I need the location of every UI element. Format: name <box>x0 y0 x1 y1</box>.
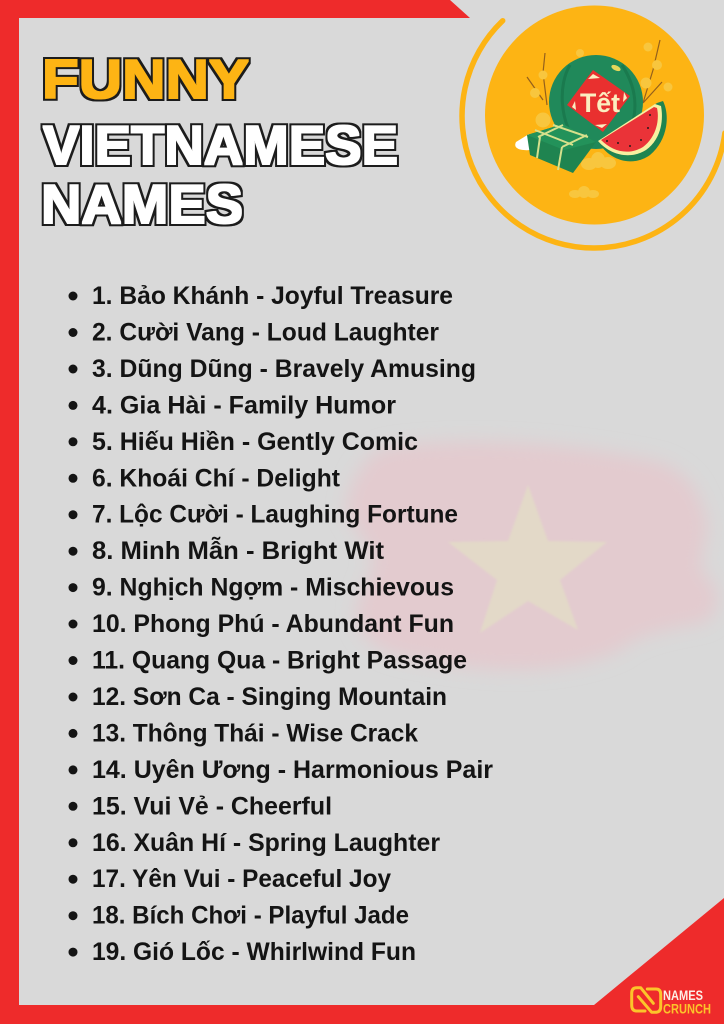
list item 8: 8. Minh Mẫn - Bright Wit <box>92 535 385 565</box>
list item 11: 11. Quang Qua - Bright Passage <box>92 646 467 674</box>
list item 4: 4. Gia Hài - Family Humor <box>92 391 396 419</box>
list item 14: 14. Uyên Ương - Harmonious Pair <box>92 756 493 784</box>
icon: banh chung <box>515 124 596 173</box>
logo text: NAMES: NAMES <box>663 988 703 1003</box>
list item 5: 5. Hiếu Hiền - Gently Comic <box>92 428 418 456</box>
watermark: Vietnam flag <box>345 442 717 670</box>
icon: N mark <box>632 988 661 1012</box>
list item 17: 17. Yên Vui - Peaceful Joy <box>92 865 391 893</box>
title: FUNNY: FUNNY <box>42 48 249 110</box>
decorative ring arc <box>462 21 724 248</box>
list item 18: 18. Bích Chơi - Playful Jade <box>92 902 409 930</box>
list item 3: 3. Dũng Dũng - Bravely Amusing <box>92 355 476 383</box>
logo: Names Crunch <box>632 988 711 1016</box>
list item 12: 12. Sơn Ca - Singing Mountain <box>92 683 447 711</box>
list item 15: 15. Vui Vẻ - Cheerful <box>92 792 332 820</box>
list item 2: 2. Cười Vang - Loud Laughter <box>92 318 439 346</box>
list item 10: 10. Phong Phú - Abundant Fun <box>92 610 454 638</box>
title: NAMES: NAMES <box>41 173 243 235</box>
label: Tet: Tết <box>580 88 620 118</box>
icon: apricot branches <box>527 40 662 105</box>
list item 7: 7. Lộc Cười - Laughing Fortune <box>92 501 458 529</box>
yellow circle <box>485 6 704 224</box>
icon: round watermelon <box>549 55 643 149</box>
list item 1: 1. Bảo Khánh - Joyful Treasure <box>92 282 453 310</box>
icon: small blossoms <box>569 152 616 198</box>
list item 6: 6. Khoái Chí - Delight <box>92 464 341 492</box>
Tet illustration in yellow circle <box>485 6 704 224</box>
logo text: CRUNCH: CRUNCH <box>663 1002 711 1016</box>
icon: watermelon slice <box>598 101 667 161</box>
names list <box>68 282 493 966</box>
list item 16: 16. Xuân Hí - Spring Laughter <box>92 829 440 857</box>
list item 19: 19. Gió Lốc - Whirlwind Fun <box>92 938 416 966</box>
title: VIETNAMESE: VIETNAMESE <box>43 114 398 176</box>
icon: red Tet diamond <box>567 70 630 132</box>
icon: apricot blossoms <box>530 42 672 128</box>
list item 13: 13. Thông Thái - Wise Crack <box>92 719 418 747</box>
list item 9: 9. Nghịch Ngợm - Mischievous <box>92 574 454 602</box>
